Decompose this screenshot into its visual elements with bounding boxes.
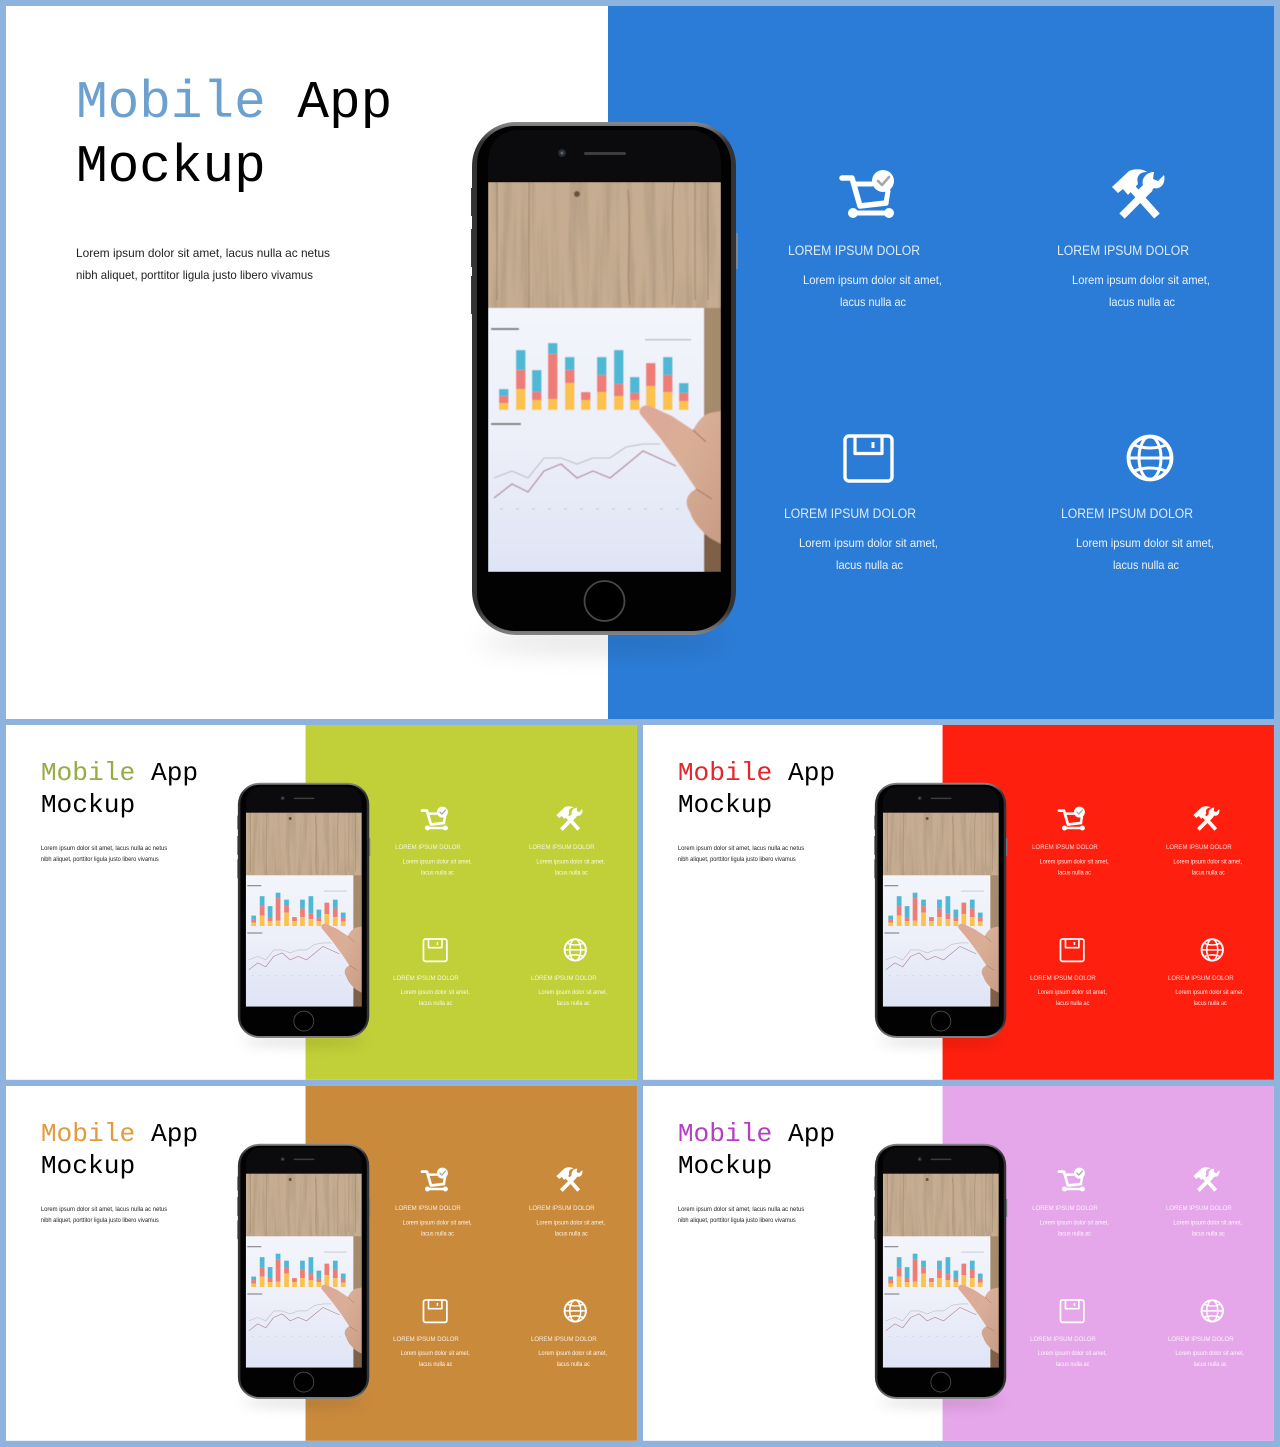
text: globe feature: lacus nulla ac — [1194, 1001, 1227, 1007]
icon: globe — [1128, 436, 1172, 480]
text: tools feature: lacus nulla ac — [1192, 1231, 1225, 1237]
icon: cart — [1059, 807, 1085, 830]
heading: globe feature: LOREM IPSUM DOLOR — [1061, 506, 1193, 521]
text: tools feature: Lorem ipsum dolor sit amet, — [1173, 1220, 1242, 1226]
heading: floppy feature: LOREM IPSUM DOLOR — [393, 1336, 459, 1343]
heading: tools feature: LOREM IPSUM DOLOR — [529, 844, 595, 851]
heading: cart feature: LOREM IPSUM DOLOR — [395, 1205, 461, 1212]
text: floppy feature: Lorem ipsum dolor sit amet, — [1038, 1351, 1107, 1357]
heading: cart feature: LOREM IPSUM DOLOR — [395, 844, 461, 851]
phone mockup — [237, 783, 370, 1046]
text: tools feature: lacus nulla ac — [555, 870, 588, 876]
title: Mobile App — [41, 1119, 198, 1149]
text: globe feature: lacus nulla ac — [557, 1362, 590, 1368]
text: floppy feature: lacus nulla ac — [1056, 1362, 1089, 1368]
title: Mockup — [76, 137, 266, 197]
intro text: nibh aliquet, porttitor ligula justo libero vivamus — [678, 1218, 796, 1224]
text: floppy feature: Lorem ipsum dolor sit amet, — [401, 1351, 470, 1357]
text: globe feature: lacus nulla ac — [1113, 558, 1179, 572]
icon: cart — [842, 170, 894, 218]
icon: globe — [1202, 939, 1223, 961]
text: cart feature: lacus nulla ac — [421, 870, 454, 876]
intro text: Lorem ipsum dolor sit amet, lacus nulla ac netus — [41, 846, 167, 852]
text: globe feature: Lorem ipsum dolor sit amet, — [538, 990, 607, 996]
text: globe feature: Lorem ipsum dolor sit amet, — [538, 1351, 607, 1357]
intro text: nibh aliquet, porttitor ligula justo libero vivamus — [41, 857, 159, 863]
heading: tools feature: LOREM IPSUM DOLOR — [1166, 1205, 1232, 1212]
text: globe feature: lacus nulla ac — [557, 1001, 590, 1007]
text: cart feature: lacus nulla ac — [421, 1231, 454, 1237]
text: floppy feature: Lorem ipsum dolor sit amet, — [799, 536, 938, 550]
heading: floppy feature: LOREM IPSUM DOLOR — [784, 506, 916, 521]
text: cart feature: lacus nulla ac — [1058, 1231, 1091, 1237]
text: tools feature: Lorem ipsum dolor sit amet, — [536, 859, 605, 865]
phone mockup — [874, 1144, 1007, 1407]
icon: tools — [1193, 1167, 1219, 1190]
heading: floppy feature: LOREM IPSUM DOLOR — [1030, 975, 1096, 982]
phone mockup — [874, 783, 1007, 1046]
heading: globe feature: LOREM IPSUM DOLOR — [531, 975, 597, 982]
heading: cart feature: LOREM IPSUM DOLOR — [1032, 1205, 1098, 1212]
title: Mockup — [41, 790, 135, 820]
title: Mockup — [41, 1151, 135, 1181]
icon: globe — [565, 939, 586, 961]
text: cart feature: lacus nulla ac — [840, 295, 906, 309]
heading: tools feature: LOREM IPSUM DOLOR — [1166, 844, 1232, 851]
text: globe feature: lacus nulla ac — [1194, 1362, 1227, 1368]
intro text: nibh aliquet, porttitor ligula justo libero vivamus — [76, 268, 313, 282]
icon: cart — [422, 1168, 448, 1191]
heading: cart feature: LOREM IPSUM DOLOR — [1032, 844, 1098, 851]
heading: globe feature: LOREM IPSUM DOLOR — [1168, 1336, 1234, 1343]
icon: floppy disk — [1060, 939, 1084, 961]
panel: pink slide — [643, 1086, 1274, 1441]
text: floppy feature: lacus nulla ac — [1056, 1001, 1089, 1007]
text: cart feature: Lorem ipsum dolor sit amet, — [403, 1220, 472, 1226]
heading: floppy feature: LOREM IPSUM DOLOR — [393, 975, 459, 982]
text: tools feature: lacus nulla ac — [555, 1231, 588, 1237]
text: floppy feature: Lorem ipsum dolor sit amet, — [401, 990, 470, 996]
icon: globe — [1202, 1300, 1223, 1322]
title: Mobile App — [678, 1119, 835, 1149]
intro text: Lorem ipsum dolor sit amet, lacus nulla ac netus — [678, 846, 804, 852]
icon: tools — [556, 806, 582, 829]
title: Mobile App — [41, 758, 198, 788]
intro text: Lorem ipsum dolor sit amet, lacus nulla ac netus — [678, 1207, 804, 1213]
icon: floppy disk — [423, 939, 447, 961]
heading: floppy feature: LOREM IPSUM DOLOR — [1030, 1336, 1096, 1343]
panel: main blue slide — [6, 6, 1274, 719]
icon: floppy disk — [1060, 1300, 1084, 1322]
heading: tools feature: LOREM IPSUM DOLOR — [1057, 243, 1189, 258]
icon: tools — [556, 1167, 582, 1190]
icon: cart — [422, 807, 448, 830]
text: globe feature: Lorem ipsum dolor sit amet, — [1175, 990, 1244, 996]
heading: cart feature: LOREM IPSUM DOLOR — [788, 243, 920, 258]
icon: floppy disk — [423, 1300, 447, 1322]
text: tools feature: lacus nulla ac — [1109, 295, 1175, 309]
phone mockup — [237, 1144, 370, 1407]
panel: red slide — [643, 725, 1274, 1080]
text: tools feature: Lorem ipsum dolor sit amet, — [1072, 273, 1210, 287]
text: tools feature: Lorem ipsum dolor sit amet, — [1173, 859, 1242, 865]
title: Mockup — [678, 1151, 772, 1181]
icon: tools — [1193, 806, 1219, 829]
panel: brown slide — [6, 1086, 637, 1441]
icon: tools — [1112, 169, 1164, 216]
panel: green slide — [6, 725, 637, 1080]
phone mockup — [471, 122, 738, 651]
heading: globe feature: LOREM IPSUM DOLOR — [1168, 975, 1234, 982]
icon: globe — [565, 1300, 586, 1322]
text: cart feature: lacus nulla ac — [1058, 870, 1091, 876]
icon: floppy disk — [845, 436, 892, 481]
intro text: Lorem ipsum dolor sit amet, lacus nulla ac netus — [41, 1207, 167, 1213]
text: floppy feature: lacus nulla ac — [836, 558, 903, 572]
text: tools feature: Lorem ipsum dolor sit amet, — [536, 1220, 605, 1226]
text: cart feature: Lorem ipsum dolor sit amet, — [1040, 1220, 1109, 1226]
text: cart feature: Lorem ipsum dolor sit amet, — [803, 273, 942, 287]
text: globe feature: Lorem ipsum dolor sit amet, — [1175, 1351, 1244, 1357]
intro text: Lorem ipsum dolor sit amet, lacus nulla ac netus — [76, 246, 330, 260]
text: globe feature: Lorem ipsum dolor sit amet, — [1076, 536, 1214, 550]
heading: tools feature: LOREM IPSUM DOLOR — [529, 1205, 595, 1212]
intro text: nibh aliquet, porttitor ligula justo libero vivamus — [41, 1218, 159, 1224]
icon: cart — [1059, 1168, 1085, 1191]
intro text: nibh aliquet, porttitor ligula justo libero vivamus — [678, 857, 796, 863]
title: Mockup — [678, 790, 772, 820]
text: floppy feature: lacus nulla ac — [419, 1001, 452, 1007]
text: tools feature: lacus nulla ac — [1192, 870, 1225, 876]
heading: globe feature: LOREM IPSUM DOLOR — [531, 1336, 597, 1343]
text: floppy feature: lacus nulla ac — [419, 1362, 452, 1368]
text: cart feature: Lorem ipsum dolor sit amet, — [403, 859, 472, 865]
title: Mobile App — [76, 73, 392, 133]
title: Mobile App — [678, 758, 835, 788]
text: cart feature: Lorem ipsum dolor sit amet, — [1040, 859, 1109, 865]
text: floppy feature: Lorem ipsum dolor sit amet, — [1038, 990, 1107, 996]
